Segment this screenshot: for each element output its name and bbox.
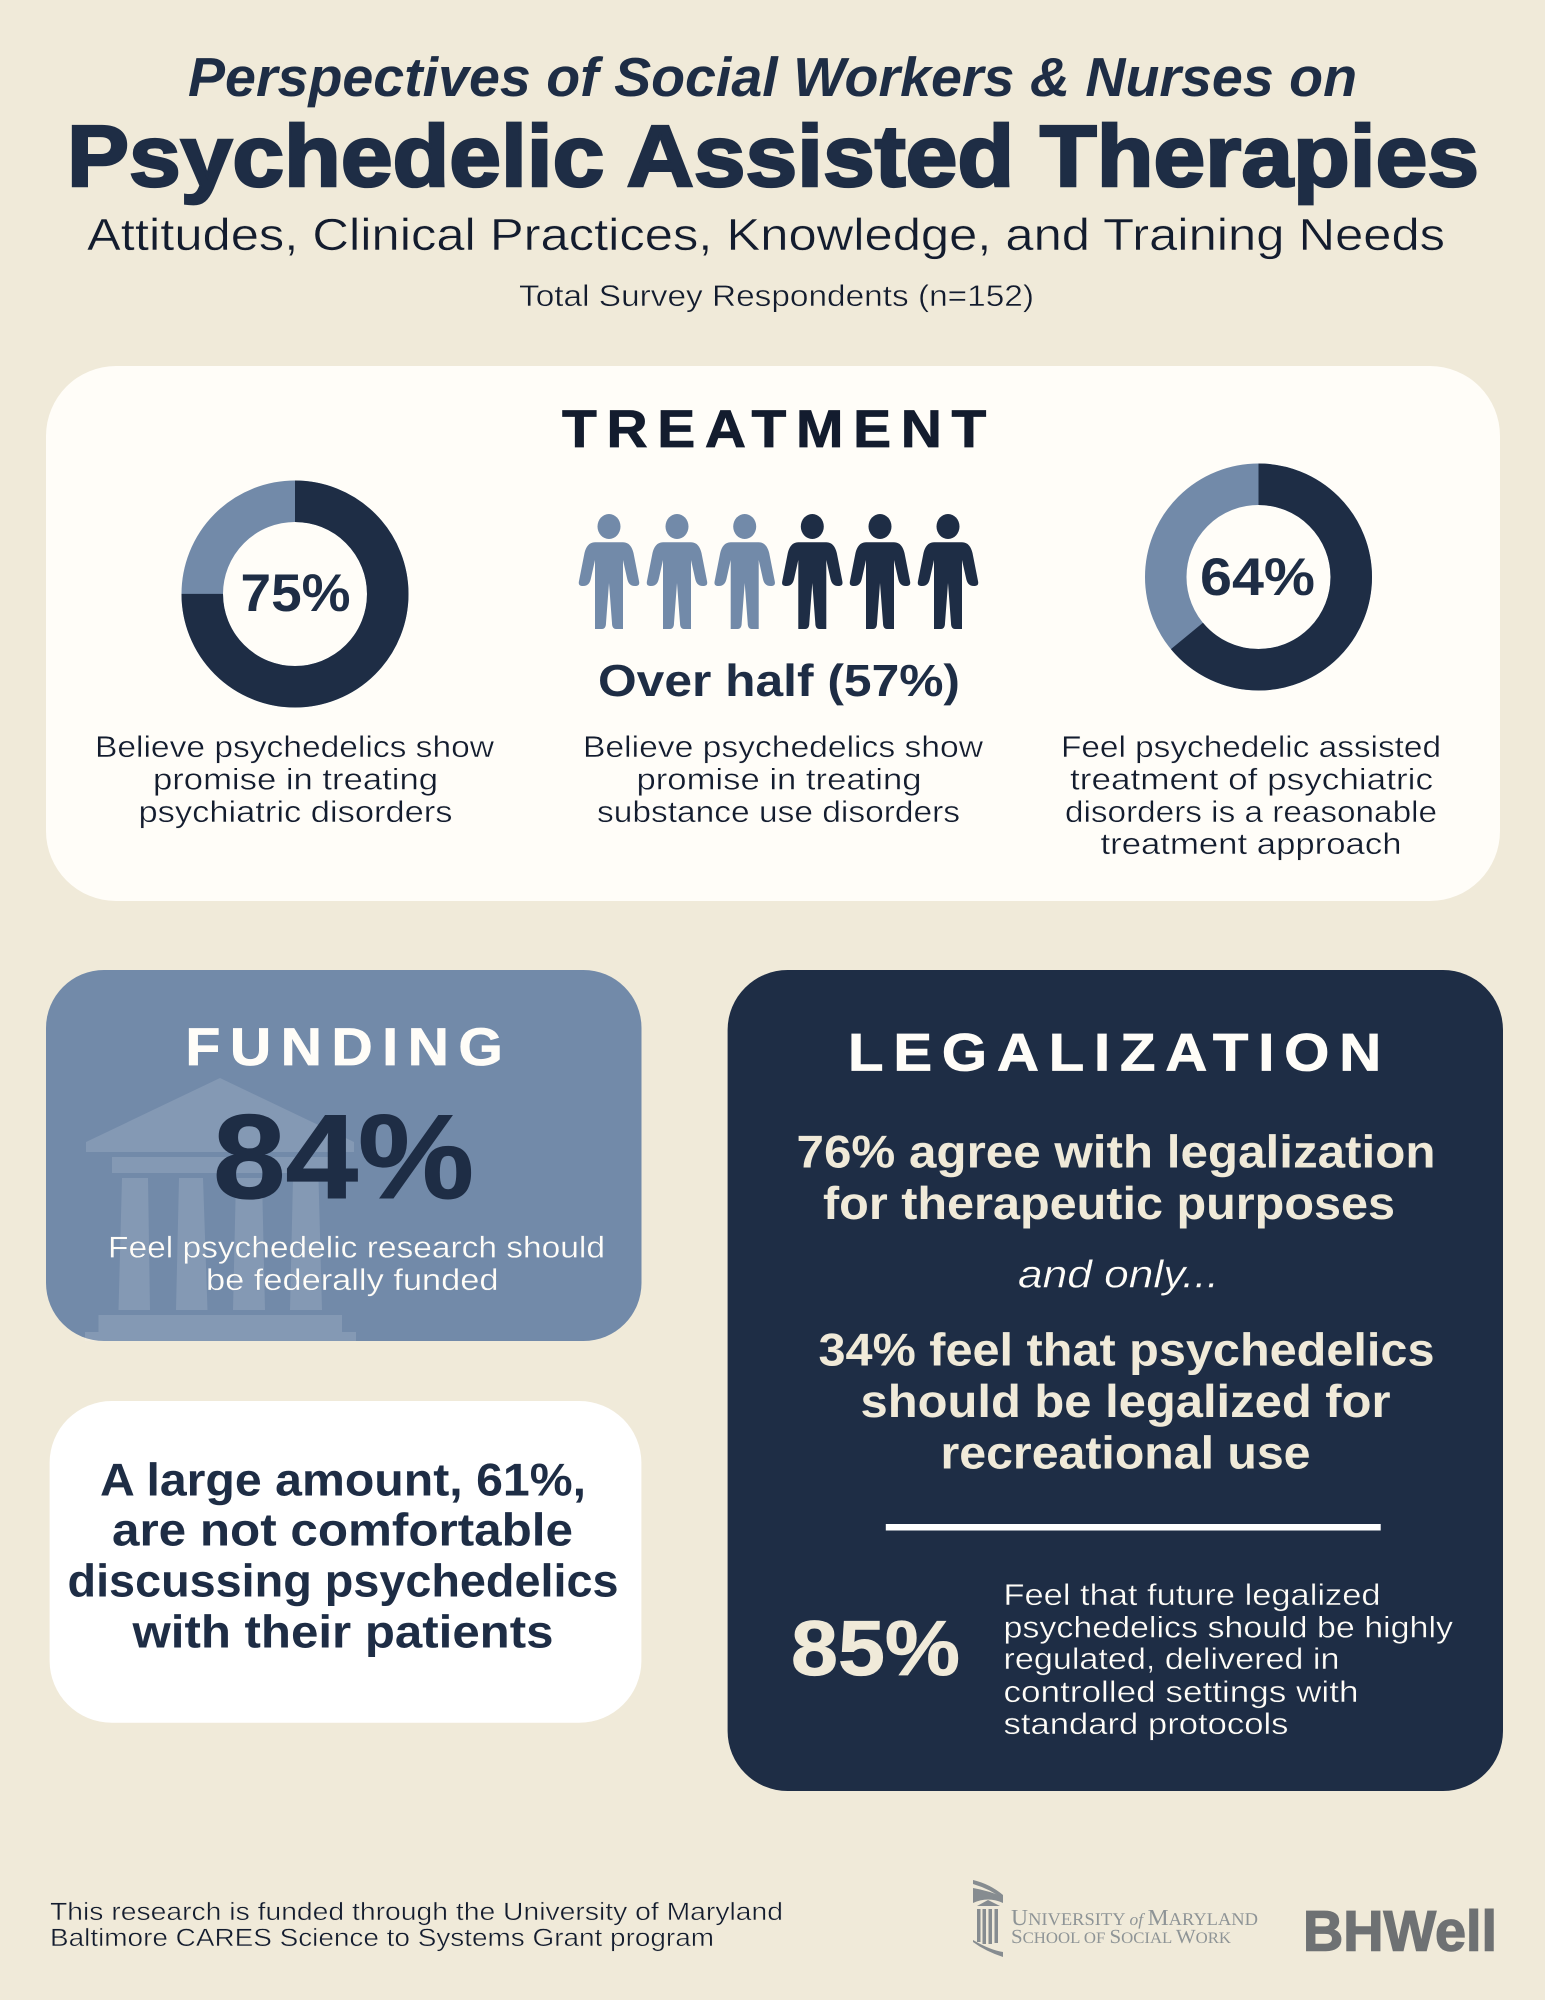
donut chart: 75%: 75% — [240, 564, 350, 623]
stat: 85%: 85% — [791, 1604, 960, 1692]
stat: 76% agree: for therapeutic purposes — [823, 1177, 1395, 1229]
footer funding note: Baltimore CARES Science to Systems Grant program — [50, 1924, 714, 1952]
panel: treatment — [46, 366, 1500, 901]
text: 85% caption: regulated, delivered in — [1004, 1643, 1340, 1676]
text: 75% caption: psychiatric disorders — [138, 796, 452, 829]
logo wordmark: SCHOOL OF SOCIAL WORK — [1011, 1926, 1231, 1948]
respondents note: Total Survey Respondents (n=152) — [519, 280, 1034, 313]
funding heading: FUNDING — [186, 1018, 512, 1077]
stat: 84%: 84% — [213, 1090, 474, 1224]
legalization heading: LEGALIZATION — [848, 1024, 1391, 1083]
main title: Psychedelic Assisted Therapies — [67, 108, 1479, 205]
stat: 76% agree — [796, 1126, 1436, 1229]
panel: funding — [46, 970, 642, 1341]
callout text — [68, 1454, 618, 1658]
stat: over half 57%: Over half (57%) — [598, 655, 960, 706]
text: 64% caption: treatment of psychiatric — [1070, 764, 1433, 796]
callout text: A large amount, 61%, — [100, 1454, 586, 1506]
connector text: and only... — [1018, 1254, 1219, 1297]
stat: 34% recreational: should be legalized for — [860, 1375, 1391, 1427]
text: 85% caption — [1004, 1579, 1453, 1741]
text: 57% caption — [583, 731, 983, 829]
text: 85% caption: controlled settings with — [1004, 1676, 1358, 1709]
text: 64% caption: disorders is a reasonable — [1065, 796, 1437, 829]
donut chart: 64% — [1166, 484, 1351, 670]
header — [67, 46, 1479, 313]
logo wordmark: UNIVERSITY of MARYLAND — [1011, 1905, 1258, 1930]
footer funding note: This research is funded through the University of Maryland — [50, 1898, 783, 1926]
text: 64% caption: Feel psychedelic assisted — [1061, 731, 1441, 764]
stat: 34% recreational: recreational use — [940, 1426, 1310, 1478]
text: 85% caption: psychedelics should be highly — [1004, 1612, 1453, 1644]
logo wordmark — [1011, 1905, 1258, 1948]
title kicker: Perspectives of Social Workers & Nurses on — [188, 46, 1357, 108]
text: 75% caption: promise in treating — [153, 764, 438, 796]
text: 64% caption — [1061, 731, 1441, 861]
icon: government building watermark — [85, 1078, 356, 1341]
stat: 34% recreational: 34% feel that psychedelics — [818, 1324, 1434, 1376]
icon: six people pictogram — [579, 514, 978, 629]
text: 64% caption: treatment approach — [1100, 828, 1402, 861]
subtitle: Attitudes, Clinical Practices, Knowledge, and Training Needs — [87, 209, 1445, 260]
stat: 76% agree: 76% agree with legalization — [796, 1126, 1436, 1178]
text: 57% caption: substance use disorders — [597, 796, 960, 829]
callout text: are not comfortable — [112, 1504, 573, 1556]
logo: BHWell: BHWell — [1303, 1900, 1497, 1964]
text: 85% caption: Feel that future legalized — [1004, 1579, 1380, 1612]
icon: university columns — [973, 1880, 1003, 1957]
logo: University of Maryland School of Social Work — [973, 1880, 1258, 1957]
donut chart: 64%: 64% — [1200, 548, 1315, 607]
text: 75% caption — [95, 731, 494, 829]
stat: 34% recreational — [818, 1324, 1434, 1478]
donut chart: 75% — [202, 501, 388, 687]
panel: legalization — [728, 970, 1503, 1791]
text: 57% caption: promise in treating — [636, 764, 922, 796]
text: funding caption: Feel psychedelic research should — [108, 1232, 605, 1264]
text: funding caption: be federally funded — [206, 1264, 498, 1297]
text: 85% caption: standard protocols — [1004, 1708, 1288, 1741]
footer funding note — [50, 1898, 783, 1952]
treatment heading: TREATMENT — [562, 400, 996, 459]
callout text: with their patients — [131, 1606, 554, 1658]
text: 75% caption: Believe psychedelics show — [95, 731, 494, 764]
panel: comfort callout — [50, 1401, 641, 1723]
callout text: discussing psychedelics — [68, 1554, 618, 1606]
text: funding caption — [108, 1232, 605, 1297]
text: 57% caption: Believe psychedelics show — [583, 731, 983, 764]
